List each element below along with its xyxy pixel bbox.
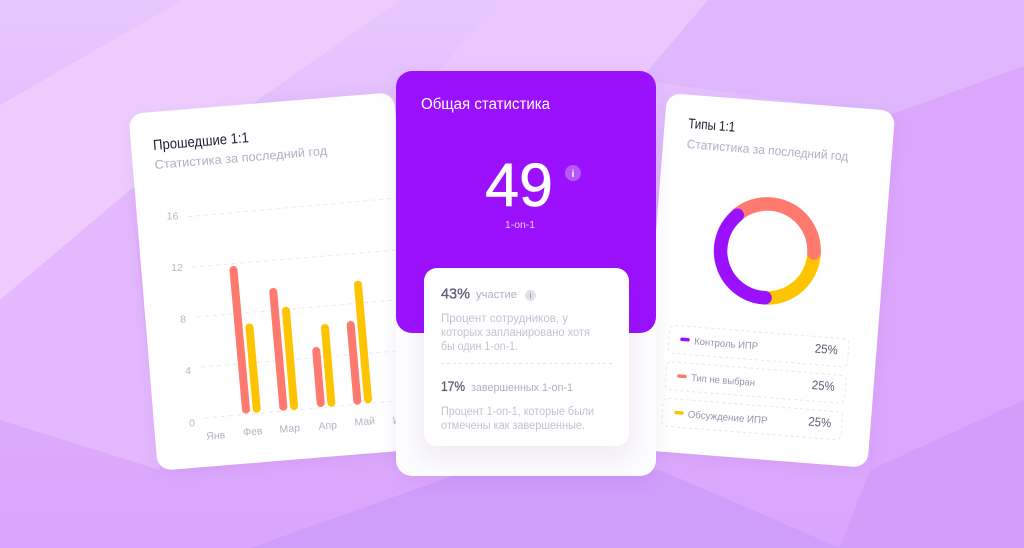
legend row: control: Контроль ИПР (694, 337, 759, 353)
text: 43 percent description (441, 313, 590, 353)
stat: 43 percent: 43% (441, 286, 470, 302)
y axis labels: 8 (180, 314, 186, 326)
legend row: no type: 25% (811, 378, 835, 394)
subtitle: past year: Статистика за последний год (686, 137, 850, 164)
y axis labels: 16 (167, 210, 178, 222)
legend row: discussion: Обсуждение ИПР (687, 409, 768, 427)
x axis labels: Мар (279, 422, 301, 436)
x axis labels: Апр (318, 419, 338, 433)
purple header (396, 71, 656, 333)
panel: overall statistics (396, 71, 656, 476)
heading: types 1:1: Типы 1:1 (688, 115, 736, 135)
stat: 43 percent: участие (476, 289, 517, 301)
x axis labels: Июн (392, 413, 415, 427)
text: 43 percent description: бы один 1-on-1. (441, 341, 518, 353)
legend row: control (668, 325, 849, 367)
text: 17 percent description: отмечены как завершенные. (441, 420, 585, 432)
caption: 1-on-1: 1-on-1 (505, 219, 535, 231)
inner stats card (424, 268, 629, 446)
text: 43 percent description: Процент сотрудников, у (441, 313, 568, 325)
y axis labels: 0 (189, 418, 195, 430)
stat: 43 percent: i (529, 292, 532, 300)
y axis labels: 12 (171, 262, 183, 274)
x axis labels (206, 413, 415, 443)
legend row: no type: Тип не выбран (691, 372, 756, 389)
bar chart (234, 270, 368, 410)
heading: past 1:1: Прошедшие 1:1 (153, 130, 250, 154)
legend row: discussion (661, 398, 843, 440)
legend row: no type (665, 362, 846, 404)
icon: info (565, 165, 581, 181)
stat: 17 percent: 17% (441, 379, 465, 394)
text: 17 percent description (441, 406, 594, 432)
subtitle: past year: Статистика за последний год (154, 144, 328, 172)
panel: past 1:1 bar chart card (128, 92, 423, 471)
x axis labels: Фев (243, 425, 263, 439)
grid lines (188, 198, 397, 418)
panel: types of 1:1 donut card (639, 93, 895, 468)
icon: info: i (572, 169, 575, 180)
stat: 17 percent (441, 379, 573, 394)
text: 17 percent description: Процент 1-on-1, которые были (441, 406, 594, 418)
big number: 49 (485, 151, 553, 219)
x axis labels: Май (354, 415, 376, 429)
stat: 17 percent: завершенных 1-on-1 (471, 382, 573, 394)
x axis labels: Янв (206, 429, 226, 443)
heading: overall statistics: Общая статистика (421, 96, 550, 113)
stat: 43 percent (441, 286, 536, 302)
text: 43 percent description: которых запланировано хотя (441, 327, 590, 339)
y axis labels (167, 210, 195, 430)
legend row: discussion: 25% (808, 415, 832, 430)
donut chart (721, 204, 814, 298)
y axis labels: 4 (185, 365, 191, 377)
legend row: control: 25% (814, 342, 838, 357)
